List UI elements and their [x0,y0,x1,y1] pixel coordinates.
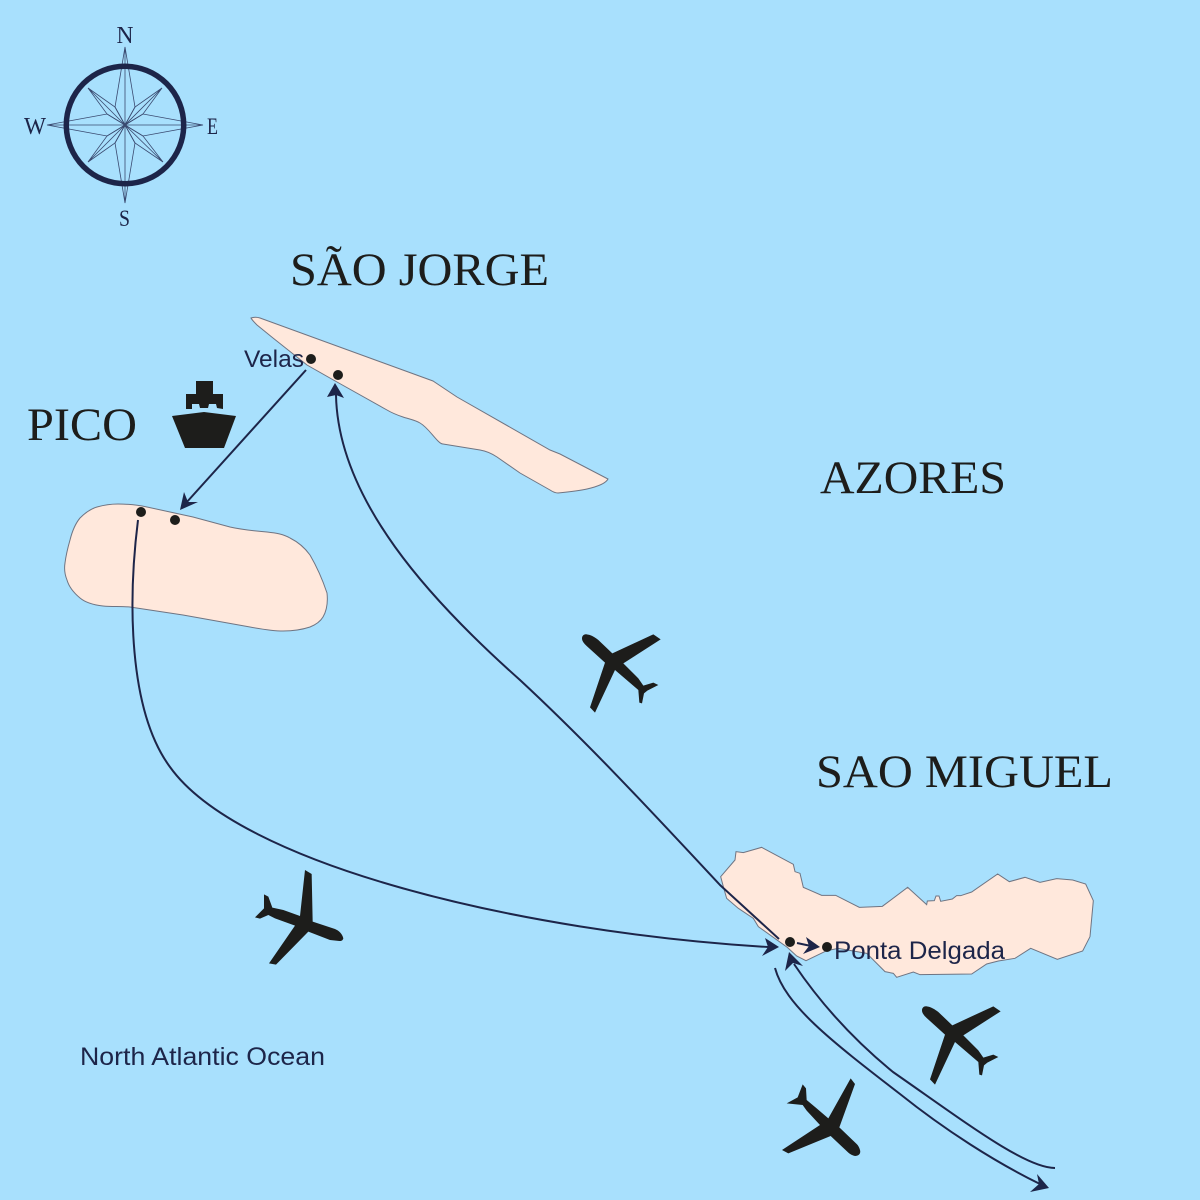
island: São Jorge [251,317,608,493]
route: departure to the southeast [775,968,1049,1192]
marker: Pico port [136,507,146,517]
icon: plane near Sao Miguel [922,1006,1001,1085]
heading: Azores: AZORES [820,452,1006,504]
icon: ship [172,381,236,448]
label: Ponta Delgada: Ponta Delgada [834,937,1005,965]
heading: Sao Miguel: SAO MIGUEL [816,746,1113,798]
marker: São Jorge airport [333,370,343,380]
compass rose: W [24,114,46,140]
marker: Ponta Delgada [822,942,832,952]
label: North Atlantic Ocean: North Atlantic Ocean [80,1043,325,1071]
label: Velas: Velas [244,346,304,373]
route: arrival from the southeast [785,952,1055,1168]
route: Velas to Pico ferry [180,370,306,510]
marker: Velas [306,354,316,364]
heading: São Jorge: SÃO JORGE [290,244,549,296]
route: short link to Ponta Delgada [797,937,820,954]
icon: plane near Pico flight [255,870,343,965]
compass rose: N [116,23,134,49]
compass rose [24,23,218,231]
route: Pico to Ponta Delgada flight [133,520,779,956]
island: Pico [65,504,327,631]
marker: Pico airport [170,515,180,525]
heading: Pico: PICO [27,399,137,451]
island: Sao Miguel [721,847,1093,977]
marker: Sao Miguel airport [785,937,795,947]
route: Ponta Delgada to São Jorge flight [327,383,779,939]
compass rose: S [119,206,130,231]
icon: plane heading southeast [782,1078,860,1156]
icon: plane near São Jorge route [582,634,661,713]
compass rose: E [207,114,218,139]
